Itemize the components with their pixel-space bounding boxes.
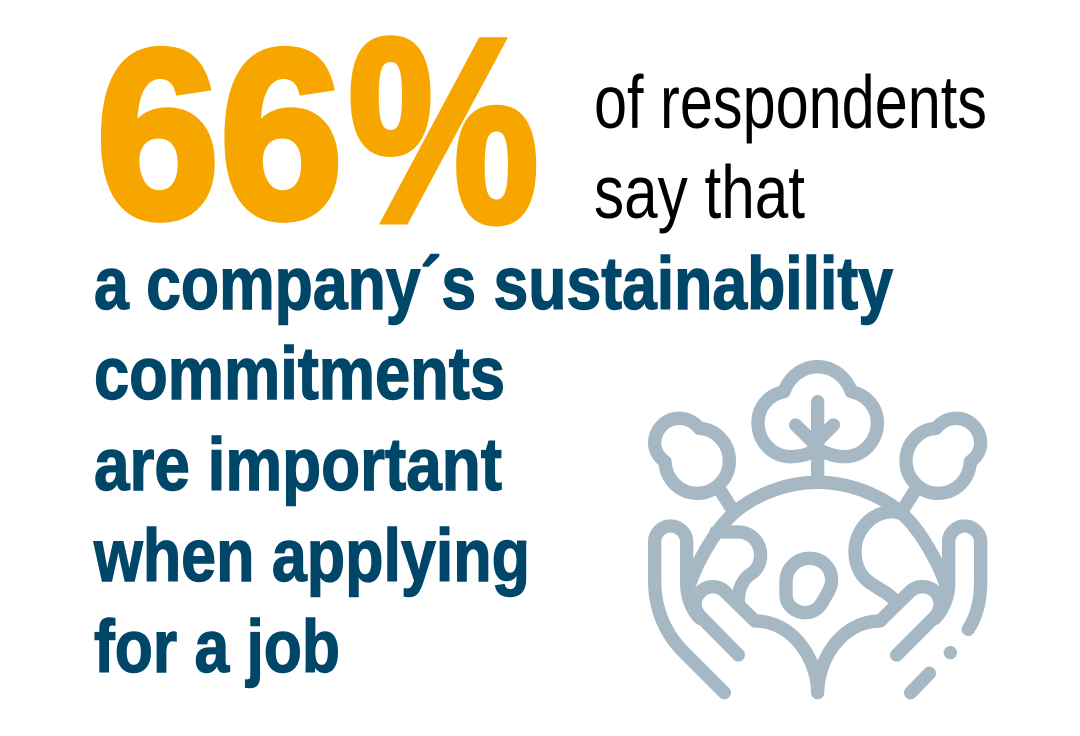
icon: right tree <box>903 418 981 510</box>
intro text <box>594 60 987 234</box>
main statement: are important <box>94 423 502 506</box>
icon: globe <box>690 482 945 613</box>
icon: accent dash and dot <box>911 646 957 693</box>
main statement: when applying <box>93 514 530 597</box>
intro text: of respondents <box>594 60 987 144</box>
intro text: say that <box>594 150 805 234</box>
main statement <box>93 242 893 688</box>
icon: left tree <box>655 418 733 510</box>
big statistic: 66% <box>96 0 539 277</box>
big statistic: 66%: 66 <box>96 0 343 268</box>
icon: hands <box>655 526 981 693</box>
main statement: for a job <box>94 605 340 688</box>
icon: center tree <box>758 367 877 482</box>
main statement: a company´s sustainability <box>94 242 893 325</box>
icon: hands holding globe with trees <box>655 367 981 693</box>
main statement: commitments <box>94 332 505 415</box>
